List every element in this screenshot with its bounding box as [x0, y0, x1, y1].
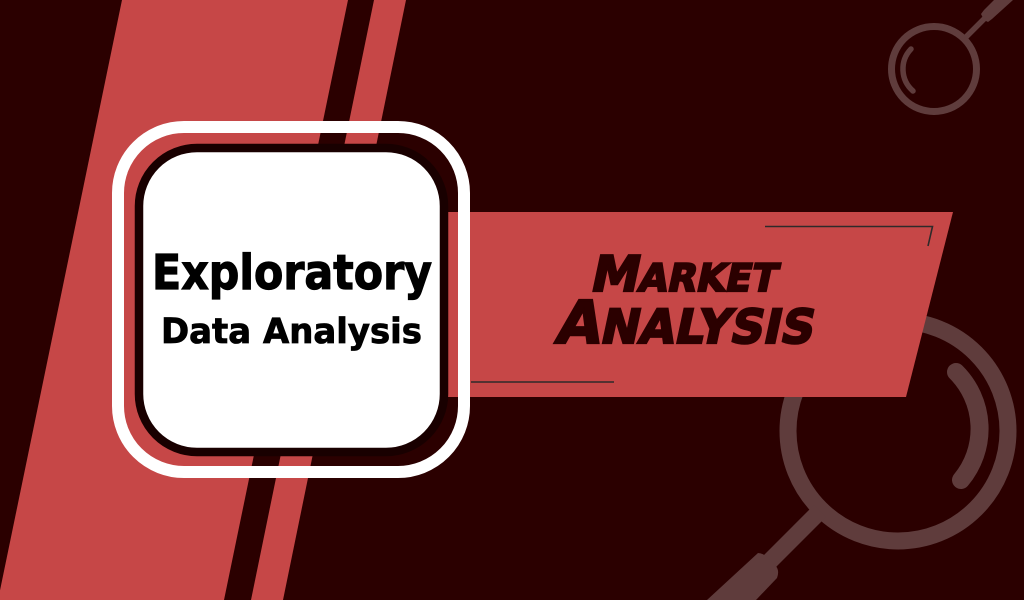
- title card: [139, 148, 444, 452]
- banner accent line: top right: [765, 226, 932, 246]
- wide diagonal band: [0, 0, 348, 600]
- Market: MARKET: [586, 246, 785, 303]
- banner title: Market Analysis: [551, 246, 823, 358]
- white outer frame: [118, 127, 464, 472]
- Analysis: ANALYSIS: [551, 290, 823, 358]
- icon: large magnifying glass: [707, 321, 1008, 600]
- narrow diagonal band: [251, 0, 406, 600]
- icon: small magnifying glass: [892, 0, 1013, 112]
- subtitle: Data Analysis: Data Analysis: [161, 312, 422, 352]
- banner ribbon: [440, 212, 953, 397]
- banner accent line: bottom left: [471, 381, 614, 383]
- title: Exploratory: Exploratory: [152, 245, 432, 301]
